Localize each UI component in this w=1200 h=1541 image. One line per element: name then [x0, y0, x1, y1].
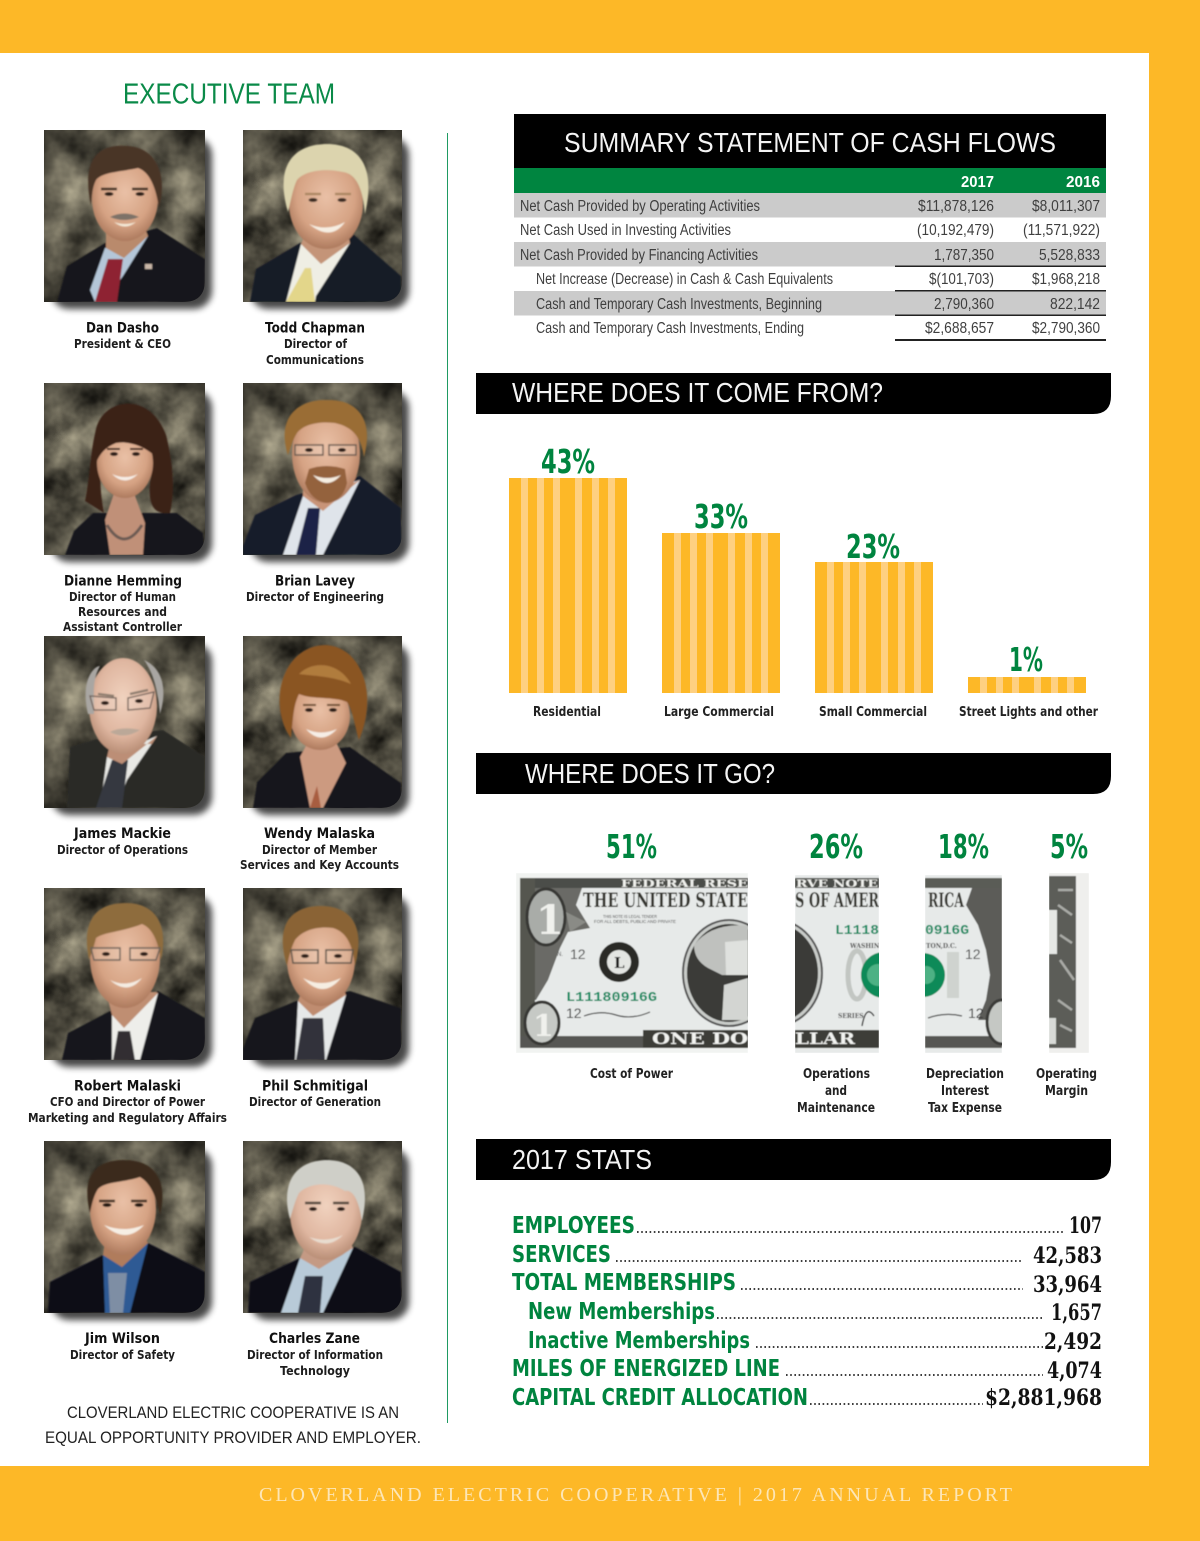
stat: new memberships: 1,657 [1051, 1300, 1102, 1326]
name: Jim Wilson [70, 1331, 175, 1362]
dollar segment: 18% depreciation, interest, tax [925, 834, 1004, 1115]
name: James Mackie [57, 826, 188, 857]
bar: Large Commercial 33% [662, 497, 780, 720]
stat: capital credit allocation [512, 1383, 1102, 1411]
bar: Street Lights and other 1% [959, 640, 1098, 720]
table rows: Cash and Temporary Cash Investments, Ending [536, 320, 804, 337]
stat: employees: EMPLOYEES [512, 1211, 635, 1239]
portrait: Brian Lavey [243, 383, 409, 562]
dollar segment: 26% operations and maintenance: RVE NOTE [796, 879, 879, 890]
name: Phil Schmitigal [249, 1078, 381, 1109]
table rows: (11,571,922) [1023, 222, 1100, 239]
dollar segment: 26% operations and maintenance: S OF AMER [795, 889, 880, 912]
name: Wendy Malaska [240, 826, 399, 872]
portrait: Todd Chapman [243, 130, 409, 309]
dollar segment: 18% depreciation, interest, tax: Interest [941, 1084, 989, 1099]
name: Brian Lavey: Director of Engineering [246, 589, 384, 604]
name: Dianne Hemming [63, 574, 183, 634]
stat: capital credit allocation: CAPITAL CREDIT ALLOCATION [512, 1383, 808, 1411]
name: Brian Lavey [246, 574, 384, 604]
table year header: 2016 [1066, 174, 1100, 191]
cash flow title bar: SUMMARY STATEMENT OF CASH FLOWS [564, 127, 1056, 158]
dollar segment: 51% cost of power: L11180916G [566, 990, 657, 1006]
stat: services: SERVICES [512, 1240, 611, 1268]
stat: new memberships [528, 1297, 1102, 1326]
name: Dianne Hemming: Resources and [78, 604, 167, 619]
section heading bar: WHERE DOES IT GO? [525, 758, 775, 789]
dollar segment: 26% operations and maintenance: SERIES [838, 1013, 864, 1020]
name: Phil Schmitigal: Director of Generation [249, 1094, 381, 1109]
dollar segment: 26% operations and maintenance: and [825, 1084, 847, 1099]
table rows: $2,688,657 [925, 320, 994, 337]
name: Jim Wilson: Jim Wilson [84, 1331, 160, 1347]
table rows: $2,790,360 [1032, 320, 1100, 337]
table year header [514, 168, 1106, 193]
bar: Residential 43%: Residential [533, 705, 601, 720]
dollar segment: 51% cost of power: ONE DO [652, 1029, 748, 1048]
bar: Street Lights and other 1%: Street Lights and other [959, 705, 1098, 720]
dollar segment: 51% cost of power [516, 834, 748, 1078]
equal opportunity statement: CLOVERLAND ELECTRIC COOPERATIVE IS AN [67, 1403, 399, 1422]
table rows: $8,011,307 [1032, 198, 1100, 215]
dollar segment: 26% operations and maintenance: L1118 [835, 923, 879, 939]
bar: Residential 43% [509, 442, 627, 720]
panel: 2017 stats [476, 1139, 1111, 1411]
stat: services [512, 1240, 1102, 1269]
name: Dan Dasho [74, 320, 171, 351]
panel: executive team [28, 78, 421, 1447]
bar: Large Commercial 33%: Large Commercial [664, 705, 774, 720]
cash flow title bar [514, 114, 1106, 168]
name: Charles Zane: Technology [280, 1363, 350, 1378]
name: Todd Chapman: Todd Chapman [265, 320, 365, 336]
name: Wendy Malaska: Services and Key Accounts [240, 857, 399, 872]
stat: miles of energized line [512, 1354, 1102, 1384]
name: Brian Lavey: Brian Lavey [275, 574, 355, 590]
dollar segment: 51% cost of power: 12 [570, 946, 586, 962]
portrait: James Mackie [44, 636, 212, 815]
heading: executive team: EXECUTIVE TEAM [123, 78, 335, 110]
table rows: Net Cash Provided by Operating Activities [520, 198, 760, 215]
dollar segment: 51% cost of power: THE UNITED STATE [583, 889, 748, 912]
table rows: Net Cash Provided by Financing Activities [520, 247, 758, 264]
name: Robert Malaski: Robert Malaski [74, 1078, 181, 1094]
name: Todd Chapman: Director of [284, 336, 347, 351]
stat: total memberships: 33,964 [1033, 1272, 1102, 1298]
section heading bar: 2017 STATS [512, 1144, 652, 1175]
name: James Mackie: Director of Operations [57, 842, 188, 857]
dollar segment: 18% depreciation, interest, tax: 12 [965, 946, 981, 962]
stat: inactive memberships [528, 1326, 1102, 1355]
panel: where does it come from [476, 373, 1111, 720]
dollar segment: 26% operations and maintenance [795, 834, 879, 1112]
stat: miles of energized line: MILES OF ENERGIZED LINE [512, 1354, 780, 1382]
portrait: Jim Wilson [44, 1141, 212, 1320]
name: Dianne Hemming: Dianne Hemming [64, 574, 182, 590]
table rows: Cash and Temporary Cash Investments, Beginning [536, 296, 822, 313]
table rows [514, 193, 1106, 341]
portrait: Charles Zane [243, 1141, 409, 1320]
name: Dan Dasho: President & CEO [74, 336, 171, 351]
dollar segment: 18% depreciation, interest, tax: Tax Expense [928, 1101, 1002, 1116]
dollar segment: 18% depreciation, interest, tax: 12 [968, 1005, 984, 1021]
name: Jim Wilson: Director of Safety [70, 1347, 175, 1362]
stat: total memberships [512, 1268, 1102, 1298]
stat: inactive memberships: Inactive Memberships [528, 1326, 750, 1354]
dollar segment: 51% cost of power: THIS NOTE IS LEGAL TENDER [603, 914, 658, 919]
name: Dianne Hemming: Director of Human [69, 589, 176, 604]
dollar segment: 51% cost of power: 12 [566, 1005, 582, 1021]
name: Dianne Hemming: Assistant Controller [63, 619, 183, 634]
portrait: Wendy Malaska [243, 636, 409, 815]
panel: summary statement of cash flows [514, 114, 1106, 341]
name: Charles Zane [247, 1331, 383, 1378]
stat: total memberships: TOTAL MEMBERSHIPS [512, 1268, 736, 1296]
equal opportunity statement [45, 1403, 421, 1447]
bar: Residential 43%: 43% [541, 442, 595, 481]
stat: services: 42,583 [1033, 1243, 1102, 1269]
bar: Street Lights and other 1%: 1% [1009, 640, 1043, 679]
equal opportunity statement: EQUAL OPPORTUNITY PROVIDER AND EMPLOYER. [45, 1428, 421, 1447]
name: James Mackie: James Mackie [73, 826, 171, 842]
dollar segment: 51% cost of power: 51% [606, 827, 657, 866]
table rows: $11,878,126 [918, 198, 994, 215]
section heading bar [476, 753, 1111, 794]
dollar segment: 51% cost of power: FEDERAL RESE [621, 879, 749, 890]
dollar segment: 18% depreciation, interest, tax: 18% [938, 827, 989, 866]
bar: Large Commercial 33%: 33% [694, 497, 748, 536]
portrait: Dianne Hemming [44, 383, 212, 562]
table rows: $(101,703) [929, 271, 994, 288]
dollar segment: 18% depreciation, interest, tax: Depreciation [926, 1067, 1004, 1082]
dollar segment: 5% operating margin [1036, 827, 1097, 1099]
stat: new memberships: New Memberships [528, 1297, 715, 1325]
dollar segment: 18% depreciation, interest, tax: TON,D.C. [926, 943, 957, 950]
name: Todd Chapman [265, 320, 365, 367]
table rows: 822,142 [1050, 296, 1100, 313]
table rows: 1,787,350 [934, 247, 994, 264]
dollar segment: 51% cost of power: 1 [533, 1009, 554, 1044]
dollar segment: 26% operations and maintenance: 26% [809, 827, 863, 866]
section heading bar [476, 1139, 1111, 1180]
table rows: 5,528,833 [1039, 247, 1100, 264]
table rows: Net Increase (Decrease) in Cash & Cash Equivalents [536, 271, 833, 288]
stat: miles of energized line: 4,074 [1047, 1358, 1102, 1384]
dollar segment: 51% cost of power: N. [557, 952, 563, 958]
section heading bar: WHERE DOES IT COME FROM? [512, 377, 883, 408]
name: Wendy Malaska: Director of Member [262, 842, 378, 857]
footer text: CLOVERLAND ELECTRIC COOPERATIVE | 2017 ANNUAL REPORT [259, 1484, 1012, 1506]
bar: Small Commercial 23%: Small Commercial [819, 705, 927, 720]
dollar segment: 18% depreciation, interest, tax: 0916G [925, 923, 969, 939]
dollar segment: 51% cost of power: Cost of Power [590, 1067, 673, 1082]
dollar segment: 26% operations and maintenance: Maintenance [797, 1101, 875, 1116]
portrait: Dan Dasho [44, 130, 212, 309]
dollar segment: 5% operating margin: 5% [1050, 827, 1088, 866]
name: Todd Chapman: Communications [266, 352, 364, 367]
dollar segment: 26% operations and maintenance: WASHIN [849, 943, 880, 950]
dollar segment: 51% cost of power: 1 [536, 897, 564, 944]
dollar segment: 5% operating margin: Operating [1036, 1067, 1097, 1082]
table rows: Net Cash Used in Investing Activities [520, 222, 731, 239]
stat: capital credit allocation: $2,881,968 [985, 1385, 1102, 1411]
stat: employees [512, 1211, 1102, 1239]
stat: inactive memberships: 2,492 [1044, 1329, 1102, 1355]
table rows: (10,192,479) [917, 222, 994, 239]
dollar segment: 18% depreciation, interest, tax: RICA [928, 889, 965, 912]
table rows: 2,790,360 [934, 296, 994, 313]
bar: Small Commercial 23% [815, 527, 933, 720]
name: Dan Dasho: Dan Dasho [86, 320, 159, 336]
dollar segment: 5% operating margin: Margin [1045, 1084, 1088, 1099]
panel: where does it go [476, 753, 1111, 1116]
portrait: Phil Schmitigal [243, 888, 409, 1067]
name: Robert Malaski: Marketing and Regulatory Affairs [28, 1110, 227, 1125]
name: Charles Zane: Director of Information [247, 1347, 383, 1362]
section heading bar [476, 373, 1111, 414]
name: Wendy Malaska: Wendy Malaska [264, 826, 375, 842]
bar: Small Commercial 23%: 23% [846, 527, 900, 566]
name: Robert Malaski: CFO and Director of Power [50, 1094, 206, 1109]
dollar segment: 51% cost of power: L [614, 954, 625, 972]
name: Charles Zane: Charles Zane [269, 1331, 360, 1347]
dollar segment: 26% operations and maintenance: Operations [803, 1067, 870, 1082]
name: Robert Malaski [28, 1078, 227, 1125]
dollar segment: 51% cost of power: FOR ALL DEBTS, PUBLIC AND PRIVATE [594, 919, 676, 924]
name: Phil Schmitigal: Phil Schmitigal [262, 1078, 368, 1094]
portrait: Robert Malaski [44, 888, 212, 1067]
dollar segment: 26% operations and maintenance: LLAR [795, 1029, 856, 1048]
table rows: $1,968,218 [1032, 271, 1100, 288]
table year header: 2017 [961, 174, 994, 191]
stat: employees: 107 [1069, 1213, 1102, 1239]
